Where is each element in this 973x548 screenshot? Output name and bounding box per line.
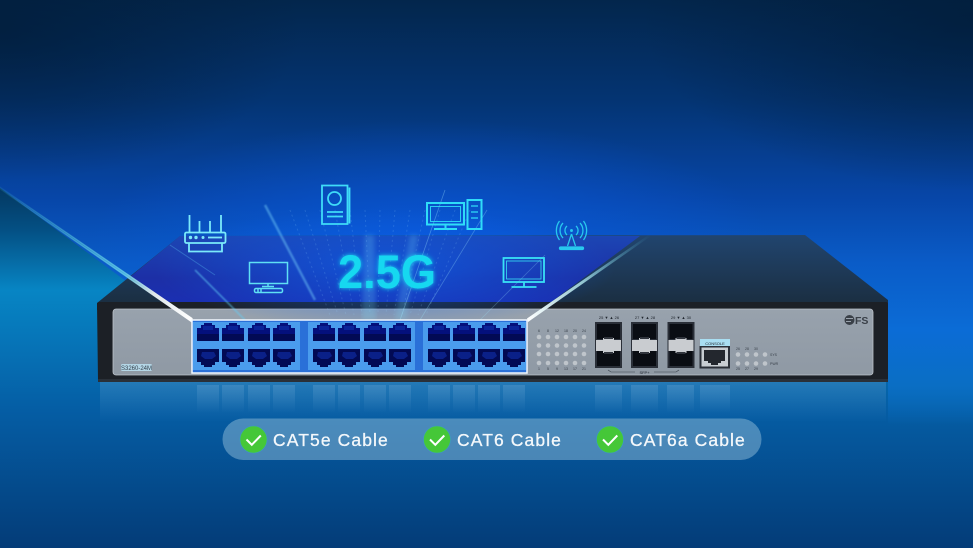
LED port numbers: 13	[564, 367, 568, 371]
LED port numbers: 8	[547, 329, 549, 333]
central glow	[90, 120, 770, 360]
reflection of switch	[100, 382, 886, 422]
light cone from ports	[0, 0, 973, 330]
SFP cages: 27 ▼ ▲ 28	[635, 315, 656, 320]
FS logo: FS	[855, 315, 868, 327]
switch chassis	[97, 235, 888, 382]
status LEDs right: 27	[745, 367, 749, 371]
top face blue projection	[130, 236, 640, 320]
item: CAT6a Cable: CAT6a Cable	[630, 430, 746, 450]
SFP cages: 25 ▼ ▲ 26	[599, 315, 620, 320]
SFP cages	[595, 315, 694, 375]
status LEDs right: 26	[736, 347, 740, 351]
highlighted RJ45 ports	[192, 320, 527, 373]
status LEDs right: 25	[736, 367, 740, 371]
icon: desktop computer	[427, 200, 482, 229]
item: CAT6 Cable: CAT6 Cable	[457, 430, 562, 450]
LED port numbers: 24	[582, 329, 586, 333]
status LEDs right: PWR	[770, 362, 779, 366]
gray panel	[113, 309, 873, 375]
SFP cages: 29 ▼ ▲ 30	[671, 315, 692, 320]
LED port numbers: 18	[564, 329, 568, 333]
status LEDs right	[736, 347, 779, 371]
model label: S3260-24M	[121, 366, 152, 372]
item: CAT5e Cable	[240, 426, 389, 453]
light rays and binary field	[170, 190, 545, 320]
LED port numbers: 21	[582, 367, 586, 371]
LED port numbers: 17	[573, 367, 577, 371]
LED port numbers: 5	[547, 367, 549, 371]
central glow on switch top	[155, 208, 615, 328]
LED port numbers: 9	[556, 367, 558, 371]
right side glow	[888, 330, 973, 385]
SFP cages: SFP+	[639, 370, 650, 375]
item: CAT6 Cable	[424, 426, 562, 453]
LED port numbers: 20	[573, 329, 577, 333]
top face	[97, 235, 888, 310]
icon: TV with set-top box	[250, 262, 288, 292]
FS logo	[844, 315, 868, 327]
light beam left	[0, 187, 192, 322]
icon: router	[185, 215, 226, 252]
status LEDs right: 29	[754, 367, 758, 371]
heading: 2.5G: 2.5G	[338, 245, 436, 298]
status LEDs left	[537, 335, 586, 365]
item: CAT6a Cable	[596, 426, 746, 453]
pill: compatible cables	[222, 418, 762, 460]
LED port numbers	[538, 329, 586, 371]
icon: server document	[322, 186, 350, 224]
status LEDs right: 28	[745, 347, 749, 351]
light beam right	[527, 234, 651, 322]
port group 2	[308, 322, 415, 370]
dark top right corner	[643, 0, 973, 190]
icon: monitor	[504, 258, 544, 287]
dark top left corner	[0, 0, 300, 180]
LED port numbers: 6	[538, 329, 540, 333]
front face	[97, 302, 888, 382]
console port	[700, 339, 730, 368]
item: CAT5e Cable: CAT5e Cable	[273, 430, 389, 450]
port group 1	[193, 322, 300, 370]
icon: wifi antenna	[556, 221, 587, 250]
LED port numbers: 1	[538, 367, 540, 371]
status LEDs right: SYS	[770, 353, 778, 357]
right side fade below switch	[888, 385, 973, 425]
status LEDs right: 30	[754, 347, 758, 351]
console port: CONSOLE	[705, 341, 725, 346]
LED port numbers: 12	[555, 329, 559, 333]
port group 3	[423, 322, 526, 370]
